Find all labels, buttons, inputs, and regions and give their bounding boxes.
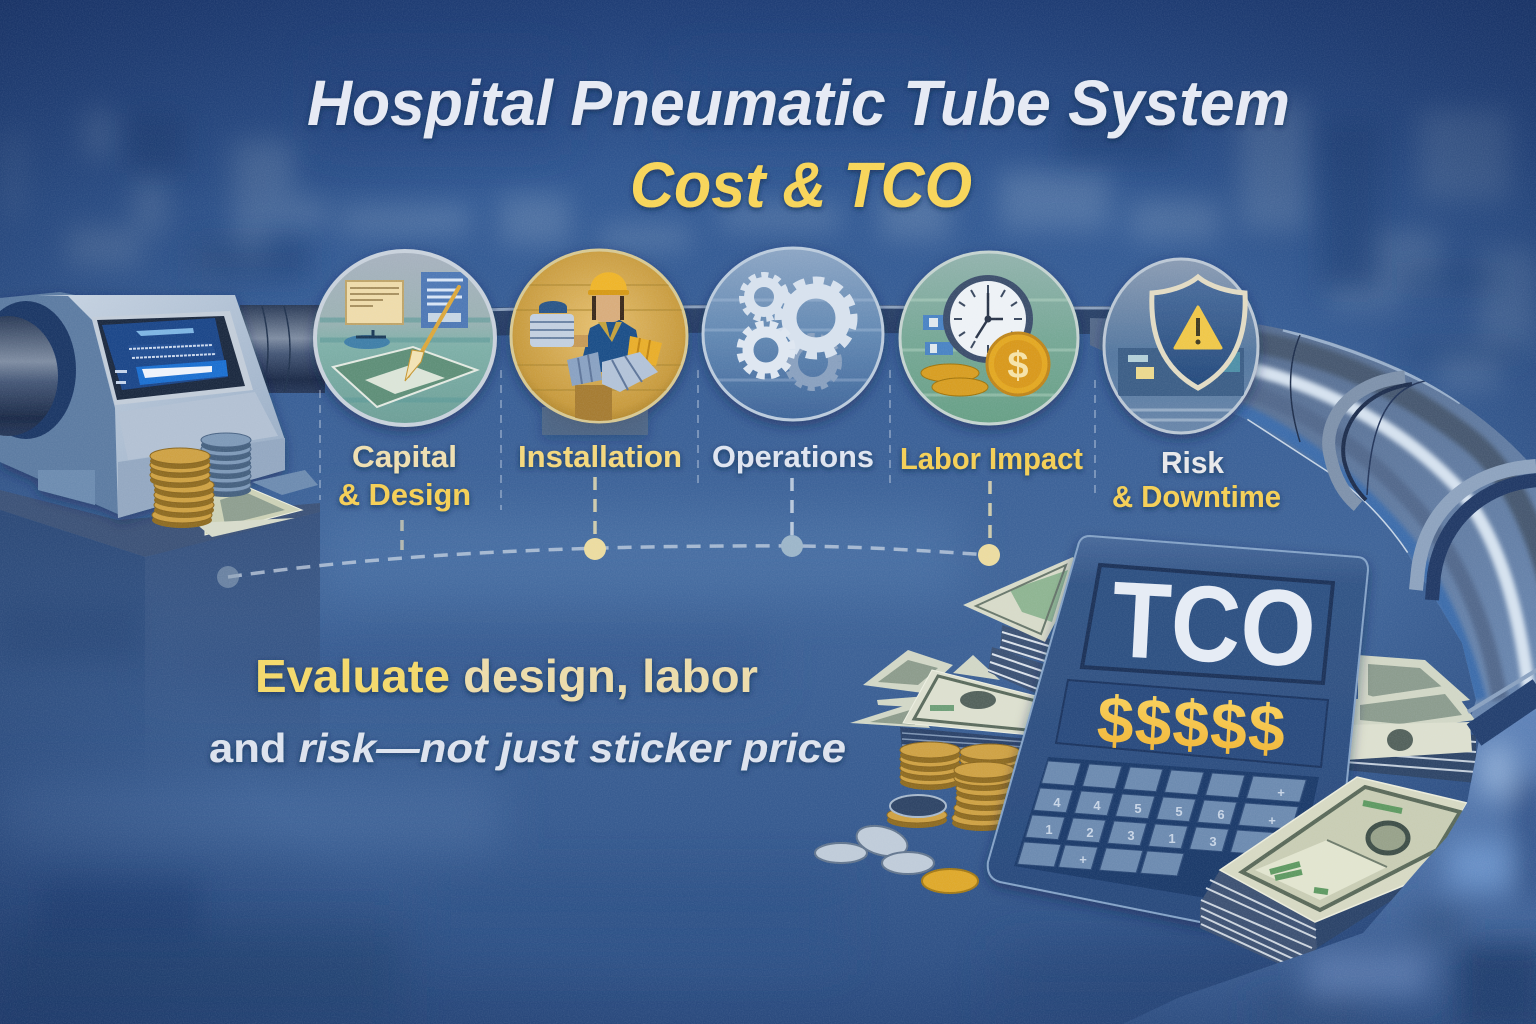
label: Capital & Design: & Design [338, 477, 471, 512]
thin connecting pipe behind circles [480, 307, 1110, 322]
calculator price panel: $$$$$ [1095, 682, 1287, 766]
stack of carriers [530, 301, 574, 347]
keypad [1014, 757, 1319, 912]
tagline: and risk—not just sticker price [209, 725, 846, 771]
pipe segment behind kiosk [240, 305, 325, 393]
label: Operations: Operations [712, 439, 874, 474]
shield [1152, 277, 1245, 388]
keypad: 4 [1093, 798, 1101, 813]
gold coins: $ [1007, 345, 1029, 387]
pipe coupling ring 2 [1416, 466, 1536, 600]
label: Labor Impact: Labor Impact [900, 441, 1083, 476]
label: Risk & Downtime: & Downtime [1112, 479, 1281, 514]
left pile [850, 650, 1040, 752]
gear: top left [742, 275, 786, 319]
gold package [627, 336, 662, 366]
calculator [988, 536, 1368, 932]
note paper [346, 281, 403, 324]
worker [570, 272, 642, 372]
keypad: 4 [1053, 795, 1061, 810]
banknote [333, 347, 477, 407]
curved pneumatic tube: upper section [1090, 318, 1536, 720]
clock [943, 275, 1033, 363]
vertical guide lines [320, 370, 1095, 510]
kiosk left pipe collar [0, 301, 76, 439]
keypad: 3 [1209, 834, 1217, 849]
label: Capital & Design: Capital [352, 439, 457, 474]
title accent: Cost & TCO [630, 149, 972, 221]
keypad: + [1268, 813, 1276, 828]
timeline dots [217, 535, 1000, 588]
coin stacks by calculator [887, 742, 1020, 831]
curved pneumatic tube: lower section [1110, 668, 1536, 1024]
panel: Capital & Design icon [315, 251, 495, 425]
keypad: 5 [1175, 804, 1183, 819]
boxes [567, 352, 658, 392]
gold coins [921, 333, 1049, 396]
tagline [209, 650, 846, 771]
tagline: Evaluate design, labor [255, 650, 758, 702]
blue document [421, 272, 468, 328]
pipe coupling ring 3 [1468, 668, 1536, 735]
gear: large [779, 281, 853, 355]
title: Hospital Pneumatic Tube System [307, 67, 1290, 139]
keypad: 6 [1217, 807, 1225, 822]
right pile [1345, 655, 1476, 783]
panel: Operations icon [700, 248, 890, 420]
cash by kiosk [195, 470, 318, 537]
panel: Labor Impact icon [900, 252, 1080, 424]
pipe coupling ring 1 [1329, 377, 1412, 506]
pen [405, 287, 459, 381]
pedestal under kiosk [0, 490, 320, 800]
gear: lower left [740, 324, 792, 376]
timeline connectors [228, 477, 990, 577]
loose coins [815, 821, 978, 893]
calculator screen: TCO [1109, 558, 1319, 690]
title [307, 67, 1290, 221]
keypad: 2 [1086, 825, 1094, 840]
kiosk screen [92, 311, 253, 405]
keypad: + [1277, 785, 1285, 800]
stage labels [338, 439, 1281, 514]
panel: Risk & Downtime icon [1104, 259, 1258, 433]
keypad: + [1079, 852, 1087, 867]
kiosk body side [0, 292, 120, 515]
kiosk left pipe [0, 316, 58, 436]
gear: small rear [787, 336, 839, 388]
keypad: 1 [1045, 822, 1053, 837]
keypad: 5 [1134, 801, 1142, 816]
label: Installation: Installation [518, 439, 682, 474]
stacked banknotes front [1200, 777, 1467, 972]
cash piles behind calculator [850, 557, 1476, 783]
silver coin stack [201, 433, 251, 497]
label: Risk & Downtime: Risk [1161, 445, 1225, 480]
gold coin stack [150, 448, 214, 528]
keypad: 3 [1127, 828, 1135, 843]
panel: Installation icon [510, 250, 690, 435]
keypad: 1 [1168, 831, 1176, 846]
calculator price panel [1056, 680, 1328, 767]
label: Risk & Downtime [1112, 445, 1281, 514]
kiosk terminal [0, 292, 285, 518]
label: Capital & Design [338, 439, 471, 512]
upper pile [963, 557, 1082, 695]
